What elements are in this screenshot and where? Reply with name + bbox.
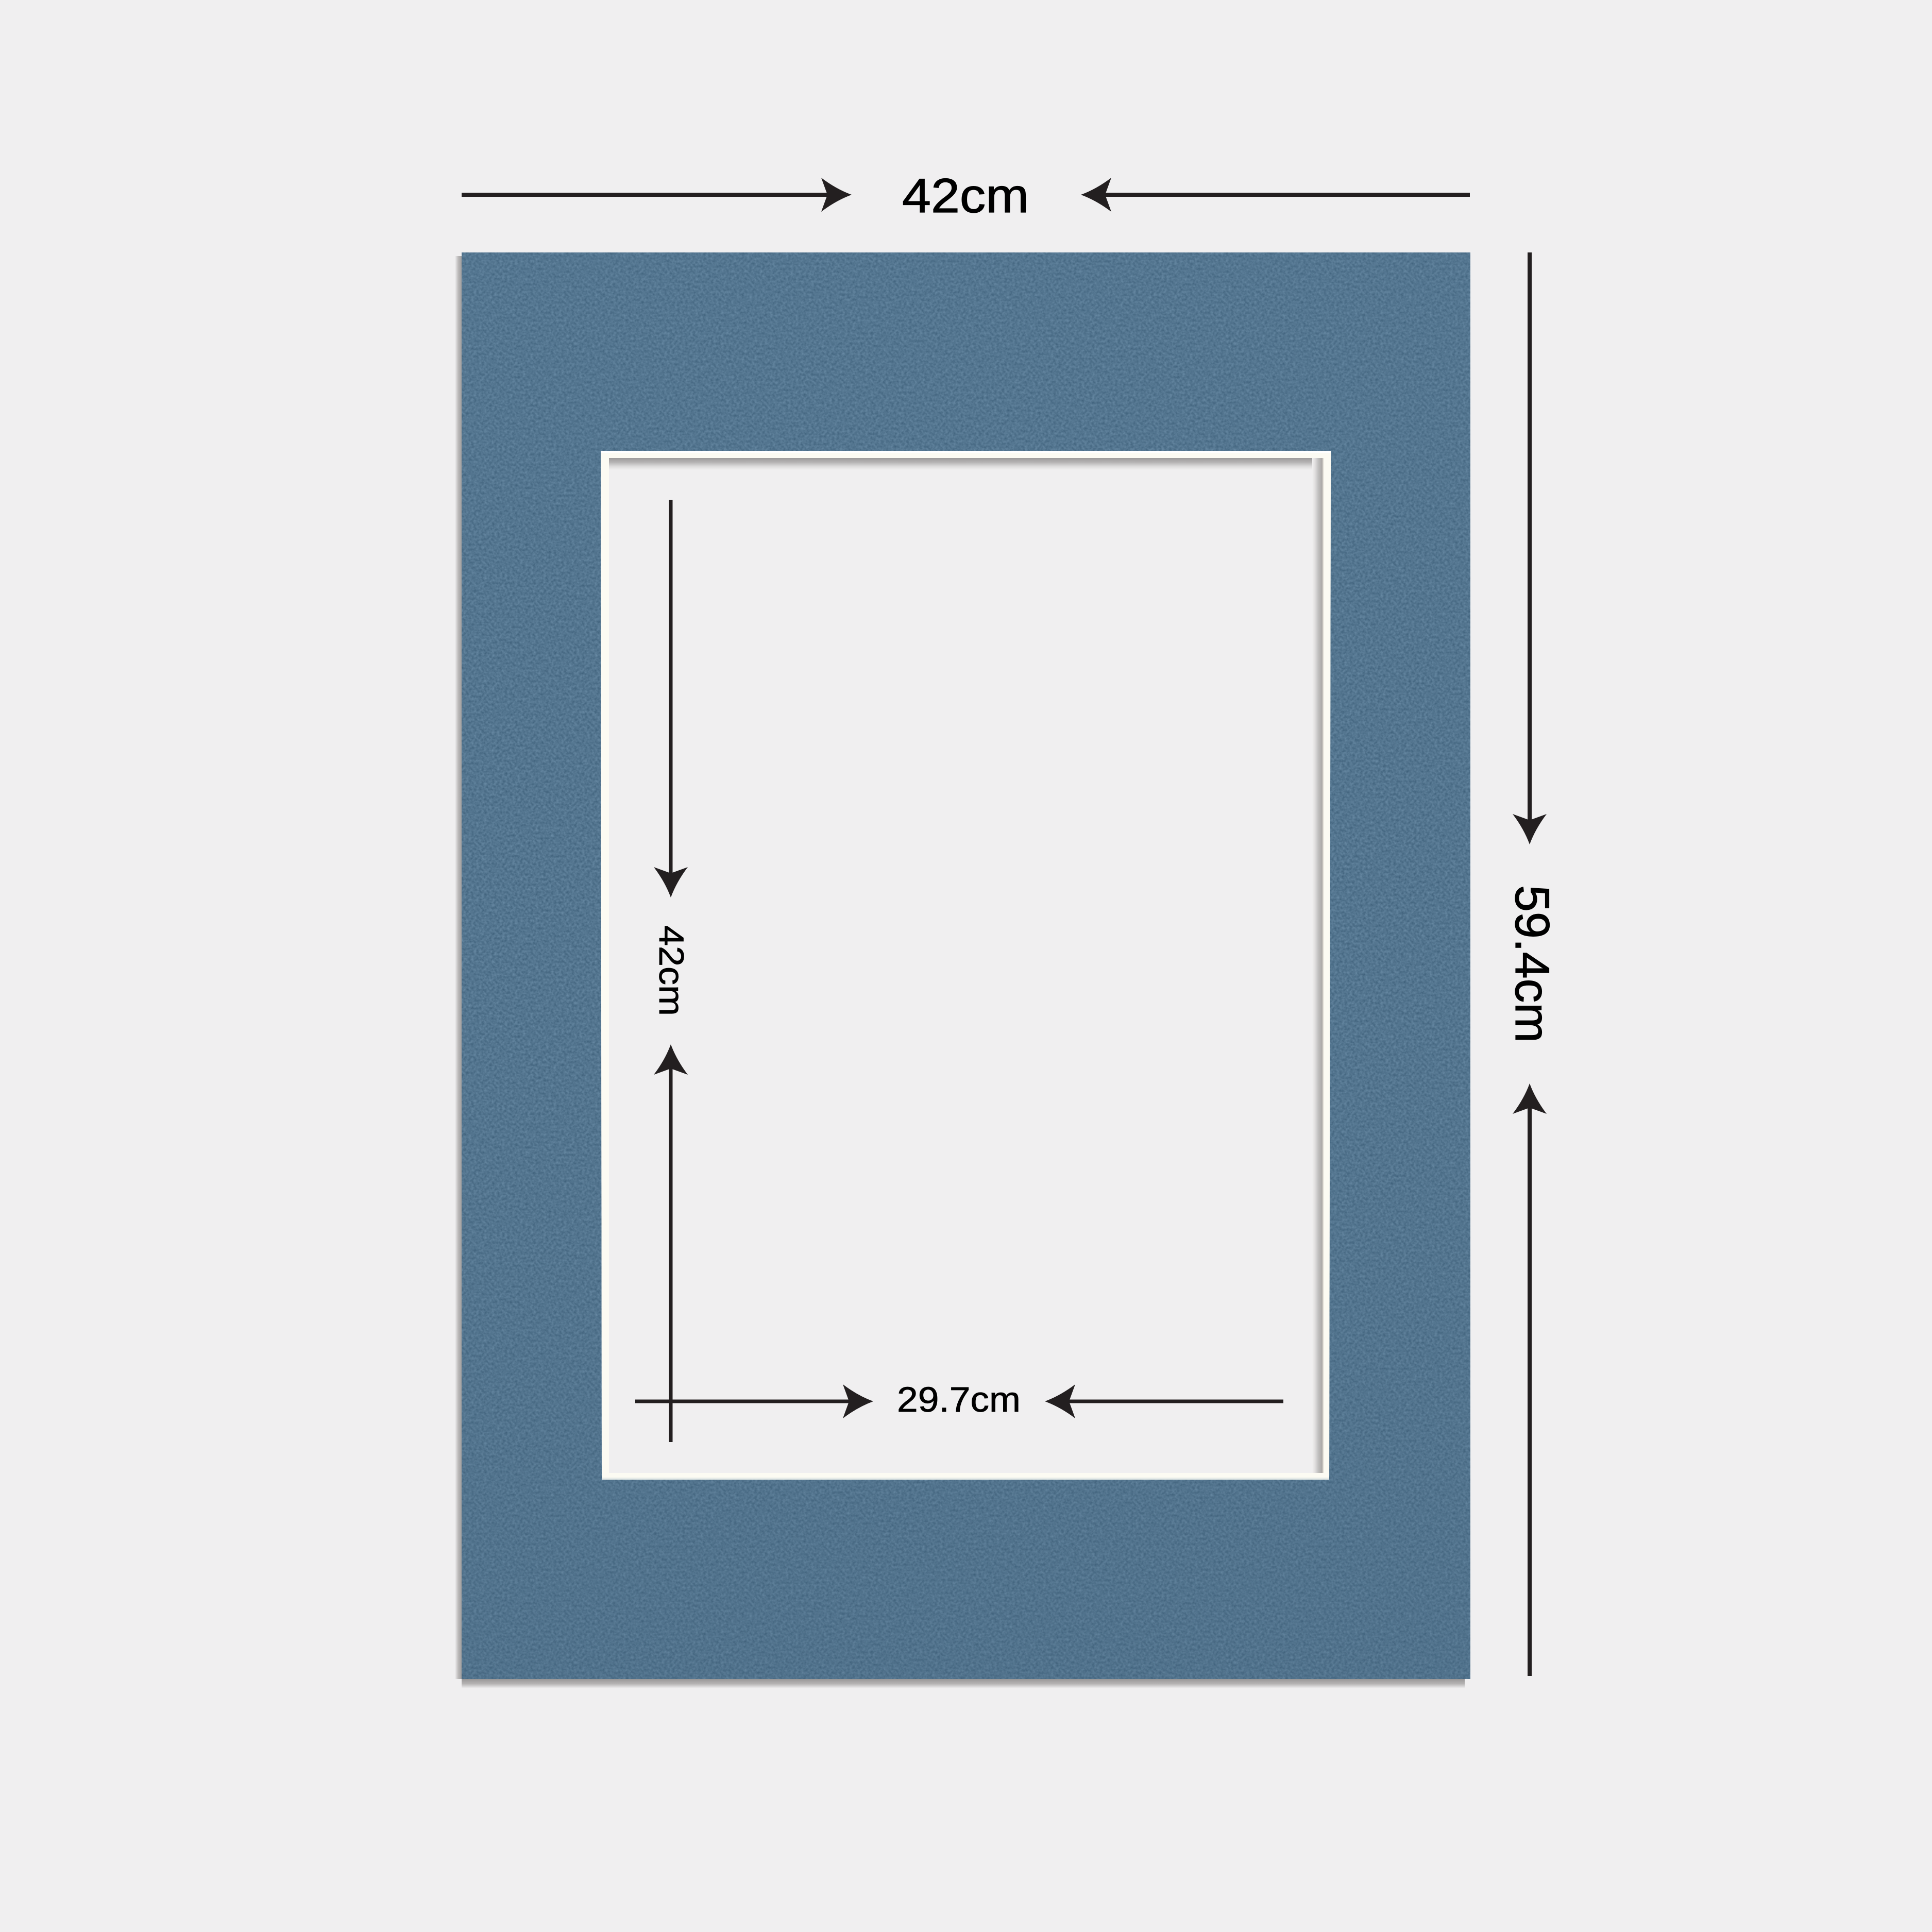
label: 42cm: 42cm [902,168,1029,223]
top arrow [1513,252,1547,844]
left arrow [462,178,852,212]
mount board [462,252,1470,1679]
dimension: overall width 42cm [462,168,1470,223]
mount drop shadow [455,256,1465,1688]
right arrow [1081,178,1470,212]
bottom arrow [654,1044,688,1442]
top arrow [654,500,688,897]
aperture with cream bevel [601,451,1331,1480]
left arrow [635,1384,873,1418]
label: 42cm: 42cm [652,925,691,1016]
panel: blue picture mount [455,252,1470,1688]
right arrow [1045,1384,1283,1418]
dimension: aperture height 42cm [652,500,691,1442]
label: 59.4cm: 59.4cm [1505,885,1560,1043]
dimension: overall height 59.4cm [1505,252,1560,1676]
bottom arrow [1513,1083,1547,1676]
dimension: aperture width 29.7cm [635,1380,1283,1419]
label: 29.7cm: 29.7cm [897,1380,1021,1419]
